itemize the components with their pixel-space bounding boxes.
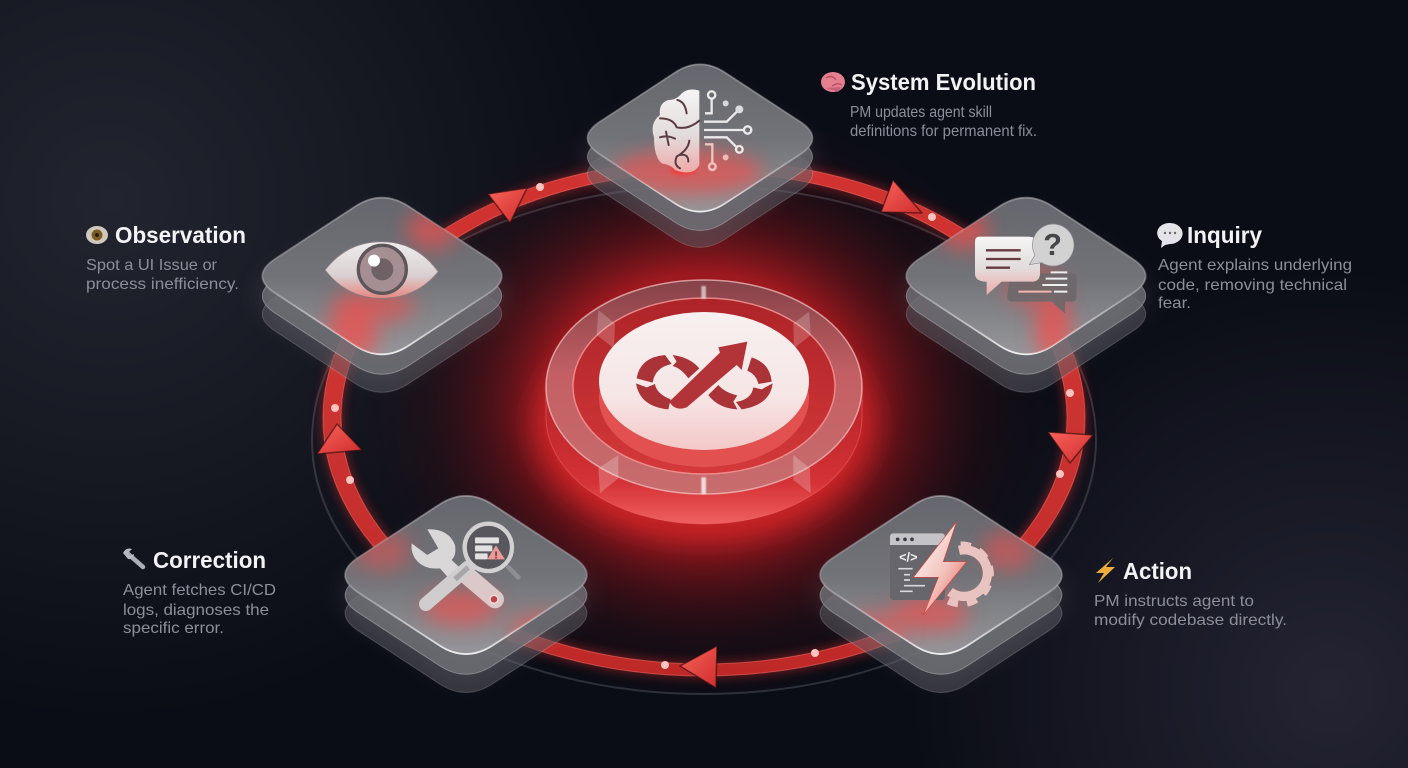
icon: brain emoji [821,72,845,92]
panel: action plate [820,496,1062,692]
arrow: inquiry to action [1048,432,1093,463]
label: inquiry: Agent explains underlying [1158,257,1352,274]
label: correction: Agent fetches CI/CD [123,582,276,599]
label: inquiry [1157,222,1352,312]
label: system evolution [821,69,1037,140]
arrow: correction to observation [317,424,362,454]
hub side wall [546,387,862,524]
white disc top [599,312,809,450]
label: action: modify codebase directly. [1094,612,1287,629]
white disc side [599,329,809,467]
label: inquiry: code, removing technical [1158,277,1347,294]
label: observation: Observation [115,222,246,248]
ring dots [331,183,1074,669]
panel: inquiry plate [906,198,1146,392]
hub inner red well [573,298,835,474]
icon: brain and circuit [653,89,751,175]
label: observation: process inefficiency. [86,276,239,293]
panel: correction plate [345,496,587,692]
label: system evolution: System Evolution [851,69,1036,95]
label: action: PM instructs agent to [1094,593,1254,610]
icon: eye [325,242,438,298]
central disc hub [534,280,874,537]
icon: code window, bolt and gear [890,522,990,615]
arrow: observation to system evolution [488,188,527,223]
icon: lightning emoji [1096,558,1115,583]
thin outer orbit line [312,186,1096,694]
icon: speech bubble emoji [1157,223,1183,248]
label: observation [86,222,246,293]
label: action [1094,558,1287,629]
hub glass ring [546,280,862,494]
label: correction: Correction [153,547,266,573]
label: action: Action [1123,558,1192,584]
arrow: system evolution to inquiry [881,180,922,213]
central red glow [250,60,1160,760]
icon: wrench and magnifier [411,524,518,604]
label: correction [123,547,276,637]
icon: code window, bolt and gear: </> [899,550,917,564]
label: observation: Spot a UI Issue or [86,257,218,274]
icon: wrench and magnifier: ! [494,550,498,561]
loop ring [323,160,1085,676]
label: system evolution: definitions for permanent fix. [850,123,1037,140]
label: correction: specific error. [123,620,224,637]
icon: infinity with rising arrow [636,342,773,409]
icon: wrench emoji [123,548,143,567]
icon: speech bubbles with question mark [975,224,1077,313]
panel: system evolution plate [587,64,813,247]
glass ring notches [597,286,811,494]
label: correction: logs, diagnoses the [123,602,269,619]
icon: eye emoji [86,226,108,244]
panel: observation plate [262,198,502,392]
icon: speech bubbles with question mark: ? [1043,228,1062,262]
arrow: action to correction [680,646,717,688]
label: inquiry: Inquiry [1187,222,1262,248]
label: system evolution: PM updates agent skill [850,104,992,121]
label: inquiry: fear. [1158,295,1191,312]
